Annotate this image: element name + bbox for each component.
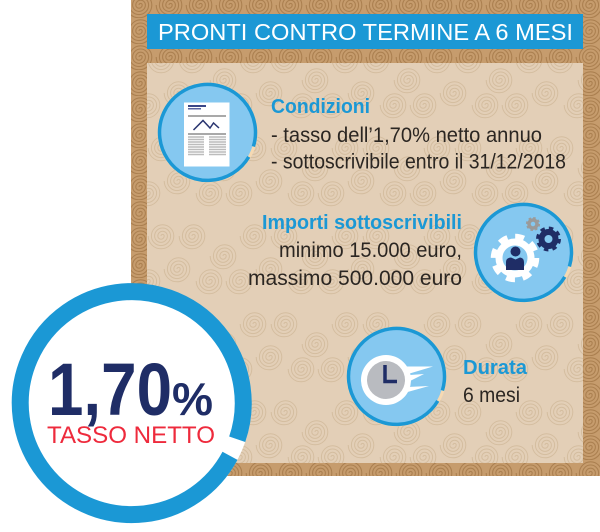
text block: condizioni: Condizioni (271, 95, 370, 118)
icon: navy gear (538, 228, 560, 250)
callout: rate badge (12, 284, 252, 524)
text block: condizioni: - tasso dell’1,70% netto annuo (271, 124, 542, 147)
icon: document (158, 82, 258, 182)
icon: clock (346, 326, 446, 426)
icon: white gear (494, 236, 536, 280)
rate label: TASSO NETTO (47, 422, 215, 449)
title banner: PRONTI CONTRO TERMINE A 6 MESI (158, 19, 573, 45)
text block: importi: Importi sottoscrivibili (262, 211, 462, 234)
icon: person (506, 246, 524, 270)
text block: importi: minimo 15.000 euro, (279, 239, 462, 262)
text block: durata: 6 mesi (463, 384, 520, 407)
big rate figure: 1,70 (48, 348, 172, 431)
panel: brown framed background (131, 0, 600, 476)
icon: grey gear (527, 218, 539, 230)
text block: durata (463, 356, 528, 407)
panel: inner beige area (147, 63, 583, 463)
text block: importi: massimo 500.000 euro (248, 267, 462, 290)
icon: gears and person (474, 202, 574, 302)
text block: condizioni: - sottoscrivibile entro il 31/12/2018 (271, 150, 566, 174)
text block: durata: Durata (463, 356, 528, 379)
text block: condizioni (271, 95, 566, 174)
text block: importi (248, 211, 462, 290)
percent sign: % (172, 373, 213, 425)
